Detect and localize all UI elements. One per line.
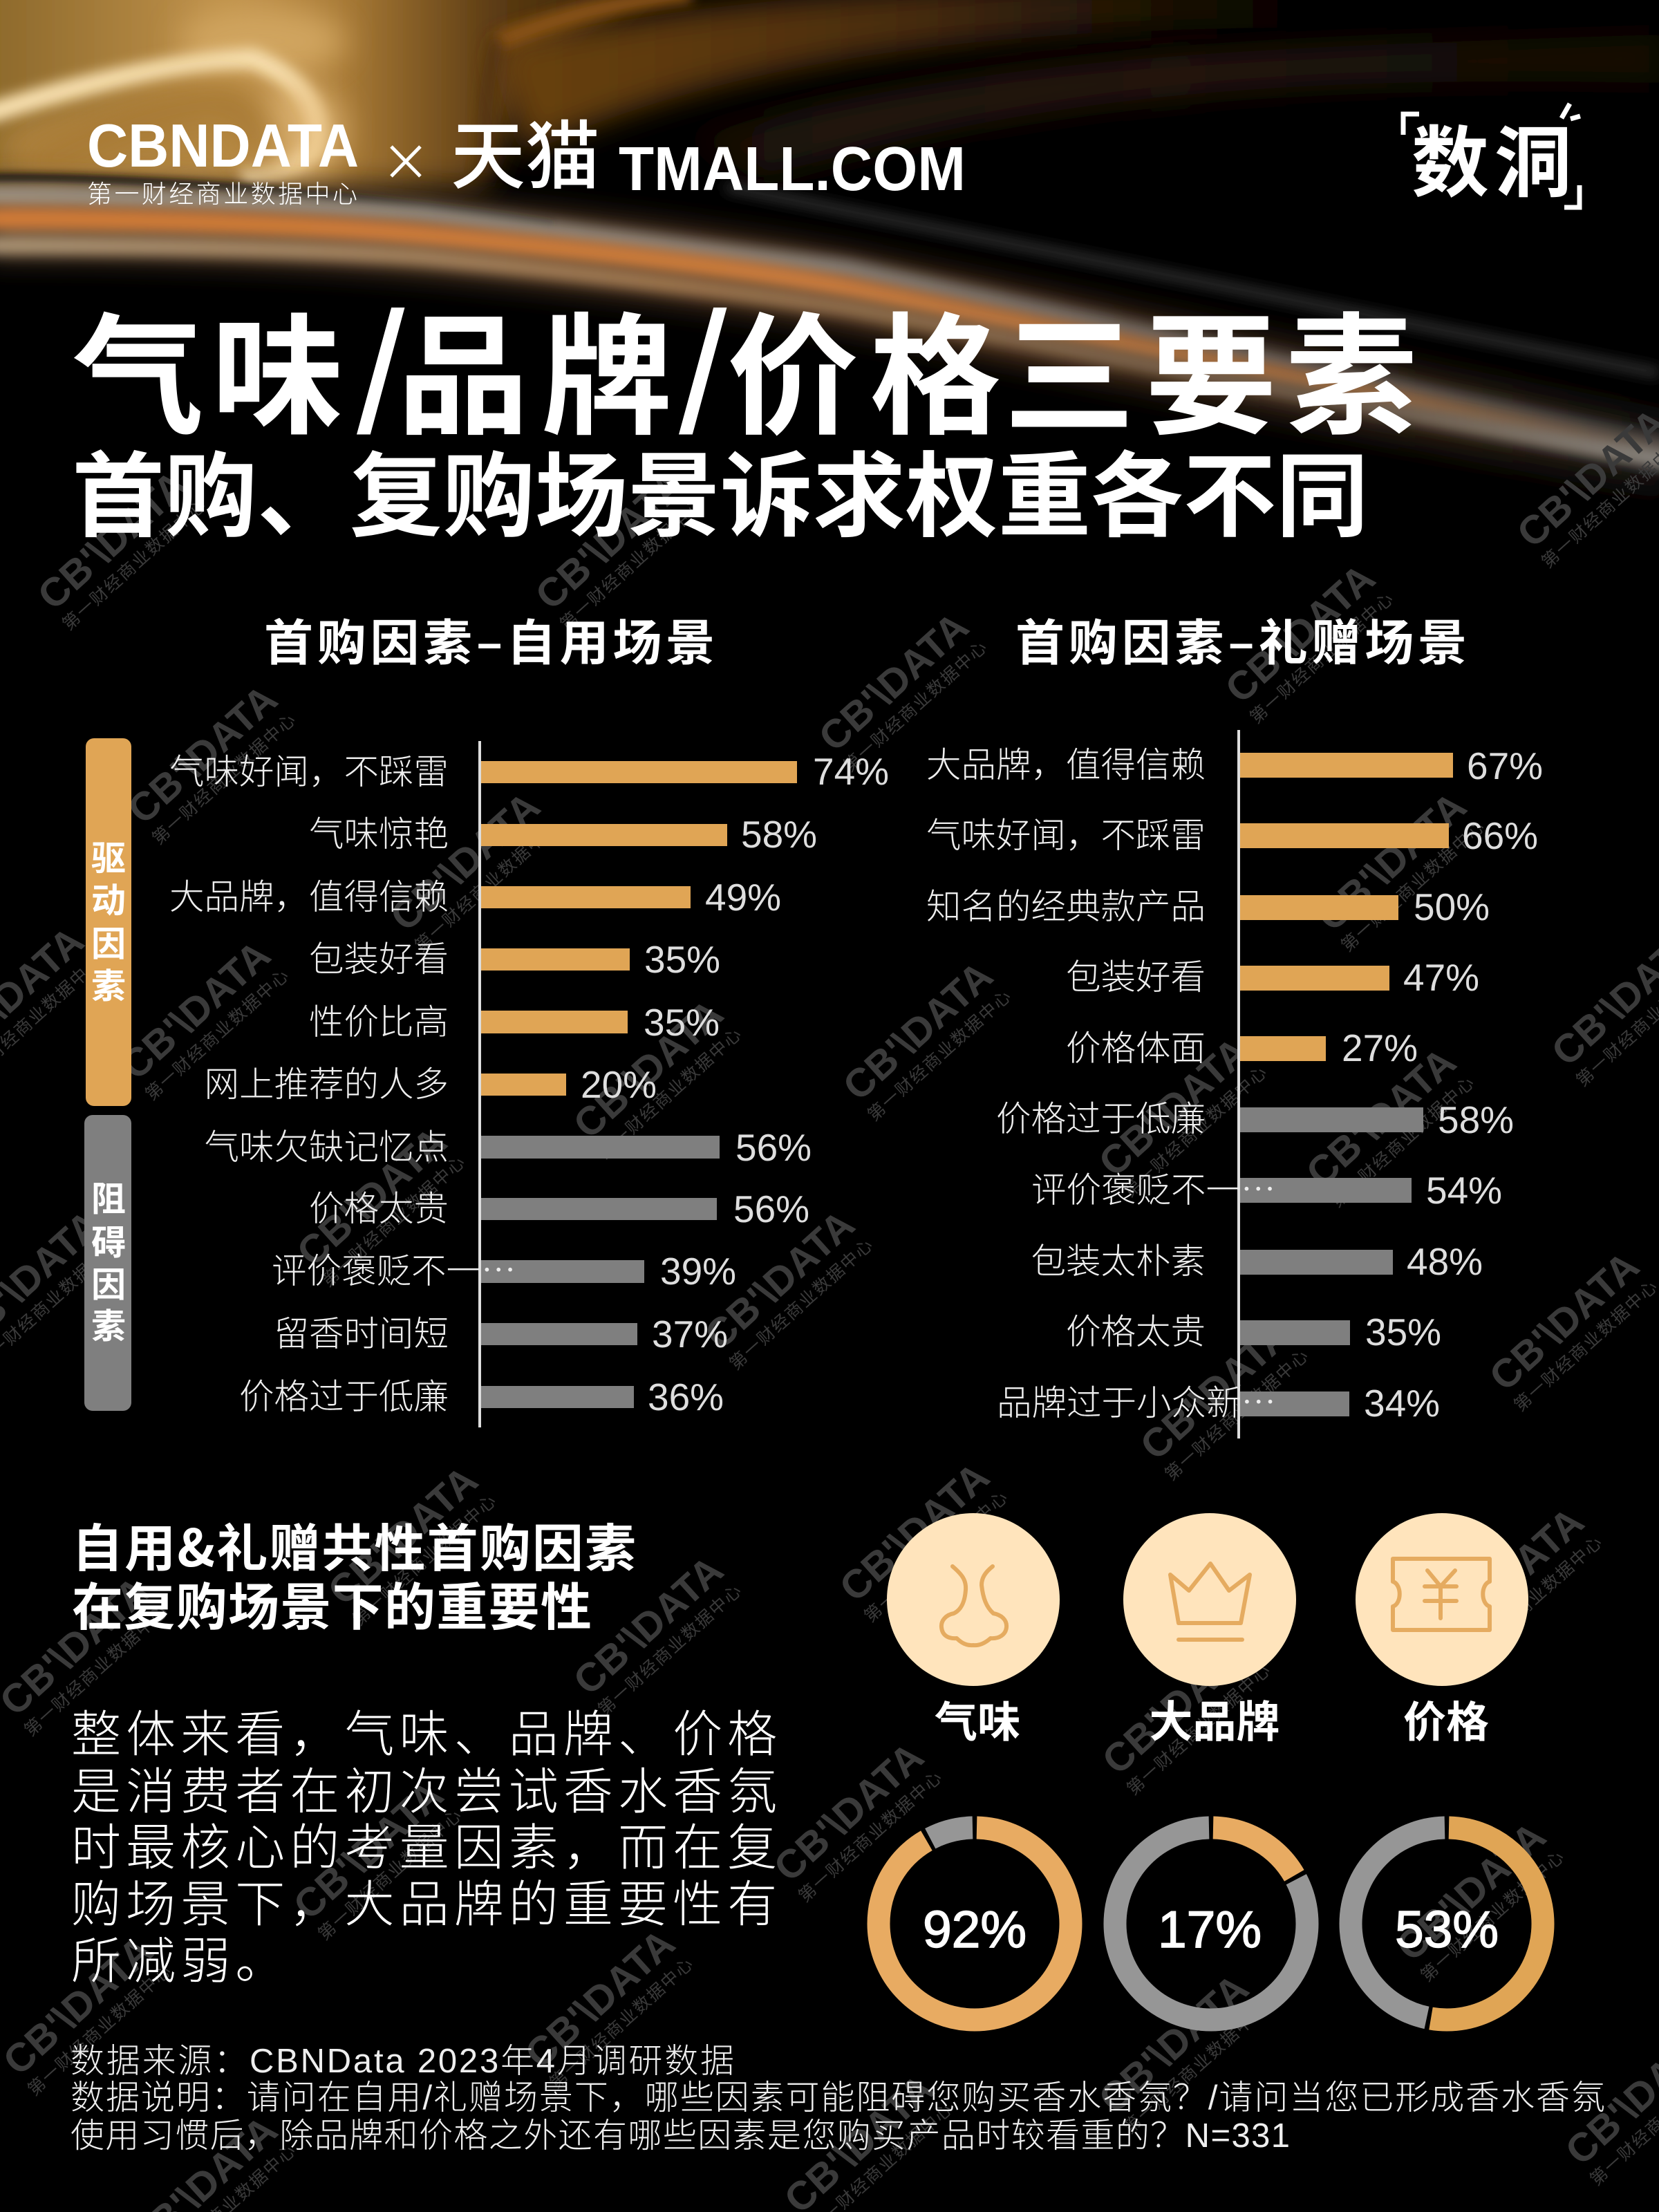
watermark pattern: 第一财经商业数据中心 (56, 492, 212, 635)
watermark pattern: CB'\DATA (1481, 1243, 1648, 1400)
data source footnote: 使用习惯后，除品牌和价格之外还有哪些因素是您购买产品时较看重的？N=331 (71, 2117, 1290, 2155)
bar row: 大品牌，值得信赖 49%: 大品牌，值得信赖 (169, 868, 449, 919)
watermark pattern: CB'\DATA (1425, 1499, 1593, 1656)
watermark pattern: CB'\DATA (319, 1457, 487, 1614)
icon: yen ticket (1356, 1513, 1528, 1686)
watermark pattern: CB'\DATA (1132, 1312, 1299, 1469)
donut chart: 17%: 17% (1158, 1900, 1262, 1958)
bar row: 留香时间短 37%: 留香时间短 (274, 1305, 449, 1356)
category tag: driving factors (86, 738, 131, 1106)
watermark pattern: 第一财经商业数据中心 (1244, 585, 1399, 729)
category tag: driving factors: 素 (91, 959, 126, 1009)
bar row: 包装好看 47%: 47% (1403, 956, 1479, 999)
bar row: 品牌过于小众新 34% (997, 1374, 1440, 1425)
body paragraph: 时最核心的考量因素，而在复 (71, 1807, 782, 1880)
bar row: 大品牌，值得信赖 67%: 67% (1467, 744, 1543, 787)
bar row: 留香时间短 37% (274, 1305, 728, 1356)
category tag: blocking factors: 碍 (91, 1215, 126, 1265)
bar row: 大品牌，值得信赖 49%: 49% (705, 876, 781, 919)
watermark pattern: CB'\DATA (565, 1547, 732, 1704)
bar row: 包装太朴素 48% (1031, 1232, 1483, 1284)
bar row: 品牌过于小众新 34%: 34% (1364, 1382, 1440, 1425)
data source footnote (71, 2043, 1605, 2155)
logo: Tmall: TMALL.COM (619, 135, 966, 204)
bar row: 大品牌，值得信赖 67% (926, 736, 1543, 787)
bar row: 评价褒贬不一 54%: 54% (1426, 1169, 1502, 1212)
watermark pattern: 第一财经商业数据中心 (409, 814, 564, 957)
watermark pattern: 第一财经商业数据中心 (543, 1951, 699, 2094)
watermark pattern: CB'\DATA (288, 1118, 456, 1275)
main title: / (357, 276, 405, 469)
bar row: 价格太贵 56%: 56% (733, 1188, 809, 1230)
watermark pattern: CB'\DATA (112, 932, 279, 1089)
bar row: 大品牌，值得信赖 67%: 大品牌，值得信赖 (926, 736, 1206, 787)
watermark pattern: 第一财经商业数据中心 (858, 1484, 1013, 1627)
watermark pattern: CB'\DATA (1217, 555, 1384, 712)
category tag: driving factors: 动 (91, 873, 126, 923)
watermark pattern: 第一财经商业数据中心 (1452, 1529, 1608, 1672)
watermark pattern: CB'\DATA (765, 1734, 932, 1891)
main title: / (679, 276, 727, 469)
bar row: 气味欠缺记忆点 56%: 56% (735, 1126, 812, 1169)
category tag: blocking factors (84, 1115, 131, 1411)
category tag: blocking factors: 阻 (91, 1172, 126, 1221)
bar row: 包装好看 35% (309, 930, 720, 982)
bar row: 包装好看 35%: 包装好看 (309, 930, 449, 982)
bar row: 价格过于低廉 36%: 价格过于低廉 (239, 1368, 449, 1419)
watermark pattern: 第一财经商业数据中心 (554, 492, 709, 635)
watermark pattern: 第一财经商业数据中心 (312, 1802, 467, 1945)
bar row: 价格太贵 56% (309, 1180, 809, 1231)
watermark pattern: 第一财经商业数据中心 (1159, 1342, 1314, 1485)
watermark pattern: 第一财经商业数据中心 (592, 1021, 747, 1164)
bar row: 包装好看 47% (1066, 948, 1479, 1000)
bar row: 价格体面 27%: 价格体面 (1066, 1020, 1206, 1071)
section heading: commonality: 自用&礼赠共性首购因素 (72, 1508, 636, 1582)
watermark pattern: CB'\DATA (119, 676, 286, 833)
watermark pattern: CB'\DATA (1090, 1029, 1257, 1185)
body paragraph (71, 1694, 782, 1993)
watermark pattern: 第一财经商业数据中心 (1121, 1657, 1276, 1800)
bar row: 价格体面 27%: 27% (1342, 1027, 1418, 1069)
main title: 气味 (73, 271, 343, 461)
watermark pattern: 第一财经商业数据中心 (21, 1958, 177, 2101)
watermark pattern: CB'\DATA (29, 462, 196, 619)
bar row: 网上推荐的人多 20% (205, 1056, 657, 1107)
bar row: 气味好闻，不踩雷 74%: 74% (813, 750, 889, 793)
logo: Tmall (451, 97, 966, 205)
subtitle: 首购、复购场景诉求权重各不同 (72, 422, 1369, 556)
bar row: 价格太贵 35%: 价格太贵 (1066, 1303, 1206, 1354)
watermark pattern: CB'\DATA (1094, 1627, 1261, 1783)
bar row: 包装好看 47%: 包装好看 (1066, 948, 1206, 1000)
bar row: 价格过于低廉 58%: 58% (1438, 1098, 1514, 1141)
watermark pattern: CB'\DATA (696, 1201, 863, 1358)
donut chart: 17% (1115, 1828, 1307, 2020)
bar row: 包装太朴素 48%: 包装太朴素 (1031, 1232, 1206, 1284)
bar row: 评价褒贬不一 54%: 评价褒贬不一… (1031, 1161, 1276, 1212)
bar row: 网上推荐的人多 20%: 网上推荐的人多 (205, 1056, 449, 1107)
body paragraph: 购场景下，大品牌的重要性有 (71, 1864, 782, 1936)
bar row: 气味好闻，不踩雷 74%: 气味好闻，不踩雷 (169, 743, 449, 794)
watermark pattern: CB'\DATA (285, 1772, 452, 1929)
bar row: 气味好闻，不踩雷 66%: 气味好闻，不踩雷 (926, 807, 1206, 858)
label: 大品牌: 大品牌 (1149, 1687, 1280, 1750)
data source footnote: 数据说明：请问在自用/礼赠场景下，哪些因素可能阻碍您购买香水香氛？/请问当您已形成香水香氛 (71, 2079, 1605, 2117)
watermark pattern: 第一财经商业数据中心 (1117, 1996, 1273, 2139)
bar row: 网上推荐的人多 20%: 20% (581, 1063, 657, 1106)
bar row: 知名的经典款产品 50% (926, 878, 1490, 929)
logo: CBNData (87, 111, 359, 210)
bar row: 气味惊艳 58%: 58% (741, 813, 817, 856)
watermark pattern: CB'\DATA (831, 1454, 998, 1611)
watermark pattern: CB'\DATA (834, 953, 1002, 1109)
watermark pattern: 第一财经商业数据中心 (861, 983, 1017, 1126)
logo: 数洞: 洞 (1494, 101, 1572, 213)
panel: self-use bar chart (84, 738, 889, 1427)
watermark pattern: 第一财经商业数据中心 (1324, 1069, 1480, 1212)
bar row: 知名的经典款产品 50%: 知名的经典款产品 (926, 878, 1206, 929)
bar row: 性价比高 35%: 35% (644, 1001, 720, 1044)
bar row: 价格体面 27% (1066, 1020, 1418, 1071)
watermark pattern: 第一财经商业数据中心 (792, 1764, 948, 1907)
watermark pattern: 第一财经商业数据中心 (1335, 814, 1490, 957)
watermark pattern: 第一财经商业数据中心 (723, 1232, 879, 1375)
bar row: 包装好看 35%: 35% (644, 938, 720, 981)
bar row: 评价褒贬不一 39%: 39% (660, 1250, 736, 1293)
watermark pattern: CB'\DATA (565, 991, 732, 1147)
bar row: 品牌过于小众新 34%: 品牌过于小众新… (997, 1374, 1276, 1425)
main title (73, 271, 1417, 469)
watermark pattern: 第一财经商业数据中心 (592, 1577, 747, 1721)
bar row: 性价比高 35% (309, 993, 720, 1044)
bar row: 价格太贵 35%: 35% (1365, 1311, 1441, 1353)
main title: 价格三要素 (727, 271, 1417, 461)
watermark pattern: 第一财经商业数据中心 (18, 1598, 174, 1741)
body paragraph: 整体来看，气味、品牌、价格 (71, 1694, 782, 1766)
donut chart: 92%: 92% (923, 1900, 1027, 1958)
watermark pattern: CB'\DATA (1297, 1039, 1465, 1196)
bar row: 价格太贵 35% (1066, 1303, 1441, 1354)
bar row: 性价比高 35%: 性价比高 (309, 993, 449, 1044)
panel: gift bar chart (926, 730, 1543, 1438)
bar row: 价格过于低廉 58% (996, 1090, 1514, 1141)
data source footnote: 数据来源：CBNData 2023年4月调研数据 (71, 2043, 734, 2080)
body paragraph: 是消费者在初次尝试香水香氛 (71, 1751, 782, 1824)
section heading: commonality: 在复购场景下的重要性 (72, 1566, 592, 1640)
watermark pattern: CB'\DATA (516, 1920, 684, 2077)
watermark pattern: 第一财经商业数据中心 (315, 1149, 471, 1292)
body paragraph: 所减弱。 (71, 1920, 290, 1993)
watermark pattern: CB'\DATA (1090, 1965, 1257, 2122)
main title: 品牌 (397, 271, 673, 461)
bar row: 气味好闻，不踩雷 74% (169, 743, 889, 794)
bar row: 包装太朴素 48%: 48% (1407, 1240, 1483, 1283)
category tag: blocking factors: 素 (91, 1299, 126, 1349)
logo: CBNData: 第一财经商业数据中心 (87, 174, 357, 210)
watermark pattern: CB'\DATA (527, 462, 694, 619)
bar row: 气味惊艳 58%: 气味惊艳 (309, 805, 449, 856)
watermark pattern: 第一财经商业数据中心 (139, 962, 294, 1105)
watermark pattern: 第一财经商业数据中心 (346, 1488, 502, 1631)
icon: nose (887, 1513, 1060, 1686)
logo: 数洞 (1403, 101, 1580, 213)
logo: 数洞: 数 (1412, 101, 1489, 213)
watermark pattern: CB'\DATA (810, 603, 977, 760)
category tag: driving factors: 驱 (91, 831, 126, 881)
bar row: 评价褒贬不一 39%: 评价褒贬不一… (272, 1242, 516, 1293)
label: 气味: 气味 (935, 1687, 1020, 1750)
label: 价格: 价格 (1403, 1687, 1489, 1750)
bar row: 大品牌，值得信赖 49% (169, 868, 781, 919)
bar row: 气味好闻，不踩雷 66% (926, 807, 1538, 858)
bar row: 气味欠缺记忆点 56%: 气味欠缺记忆点 (205, 1118, 449, 1170)
watermark pattern: 第一财经商业数据中心 (1117, 1059, 1273, 1202)
bar row: 价格过于低廉 36% (239, 1368, 724, 1419)
bar row: 气味欠缺记忆点 56% (205, 1118, 812, 1170)
chart heading: self use: 首购因素–自用场景 (264, 604, 715, 675)
donut chart: 53% (1351, 1828, 1543, 2020)
icon: multiply sign between logos (391, 147, 420, 176)
bar row: 留香时间短 37%: 37% (652, 1313, 728, 1356)
bar row: 知名的经典款产品 50%: 50% (1414, 885, 1490, 928)
watermark pattern: CB'\DATA (1387, 1813, 1555, 1970)
bar row: 评价褒贬不一 39% (272, 1242, 736, 1293)
bar row: 价格过于低廉 58%: 价格过于低廉 (996, 1090, 1206, 1141)
section heading: commonality (72, 1508, 636, 1640)
donut chart: 53%: 53% (1395, 1900, 1499, 1958)
icon: crown (1123, 1513, 1296, 1686)
watermark pattern: CB'\DATA (382, 783, 549, 940)
bar row: 评价褒贬不一 54% (1031, 1161, 1502, 1212)
watermark pattern: 第一财经商业数据中心 (1508, 1273, 1659, 1416)
logo: Tmall: 天猫 (451, 97, 600, 205)
category tag: driving factors: 因 (91, 917, 126, 966)
bar row: 气味惊艳 58% (309, 805, 817, 856)
watermark pattern: 第一财经商业数据中心 (1414, 1844, 1570, 1987)
watermark pattern: 第一财经商业数据中心 (837, 634, 993, 777)
bar row: 价格过于低廉 36%: 36% (648, 1376, 724, 1418)
chart heading: gift: 首购因素–礼赠场景 (1015, 604, 1467, 675)
bar row: 价格太贵 56%: 价格太贵 (309, 1180, 449, 1231)
category tag: blocking factors: 因 (91, 1257, 126, 1307)
bar row: 气味好闻，不踩雷 66%: 66% (1462, 814, 1538, 857)
donut chart: 92% (879, 1828, 1071, 2020)
logo: CBNData: CBNDATA (87, 111, 359, 180)
watermark pattern: 第一财经商业数据中心 (146, 706, 301, 850)
watermark pattern: CB'\DATA (1308, 783, 1475, 940)
